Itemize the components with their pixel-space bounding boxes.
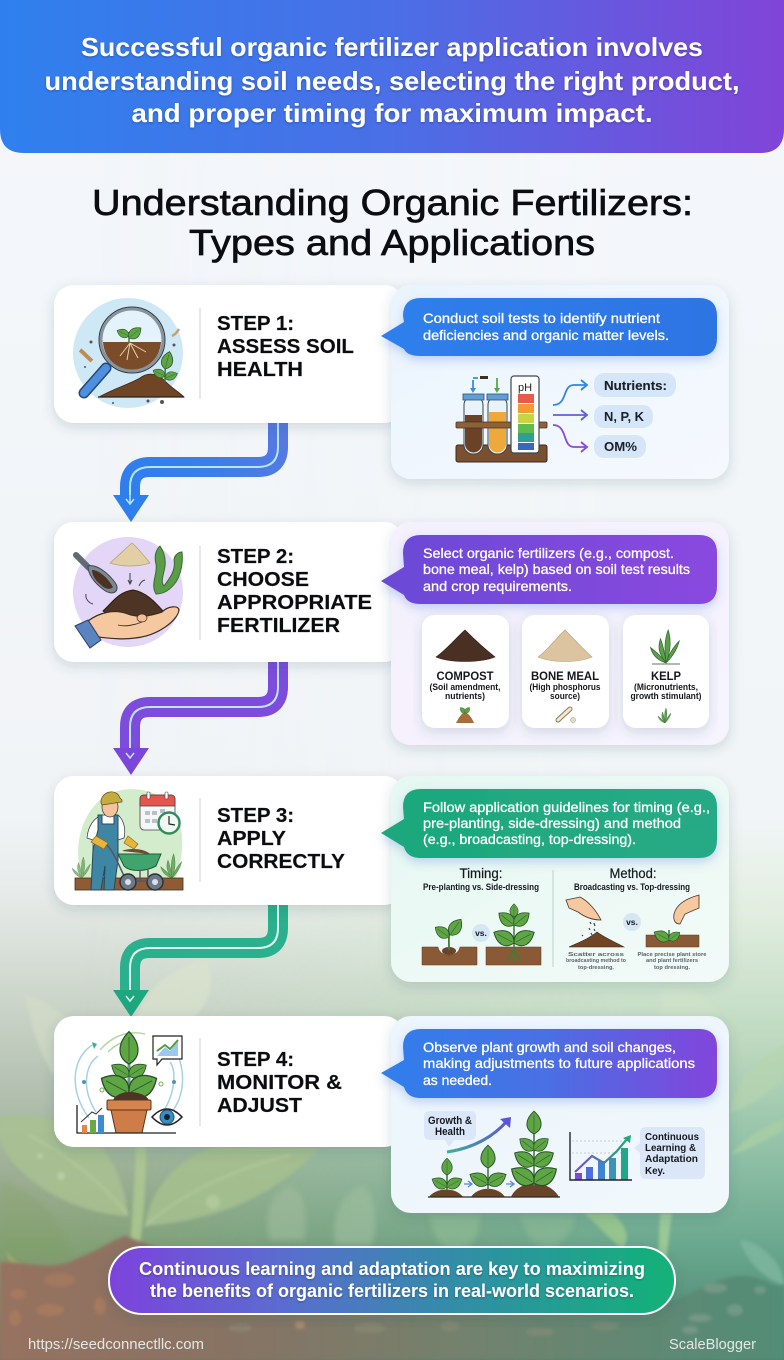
step 4 heading: ADJUST (217, 1094, 302, 1117)
method column: Place precise plant store (638, 952, 707, 958)
icon: test tubes and pH strip: pH (518, 382, 532, 394)
card: compost: COMPOST (436, 669, 494, 683)
continuous learning label: Adaptation (645, 1153, 698, 1165)
step 3 heading (217, 804, 345, 873)
step 4 heading (217, 1048, 342, 1117)
card: kelp (623, 615, 709, 728)
speech bubble (381, 535, 717, 604)
connector arrow: step 3 to step 4 (113, 903, 278, 1017)
continuous learning label: Key. (645, 1165, 665, 1177)
soil clumps (9, 1273, 766, 1336)
step 2 heading: APPROPRIATE (217, 591, 372, 614)
continuous learning label: Learning & (645, 1142, 696, 1154)
step 4 card (54, 1016, 404, 1147)
step 4 panel (381, 1016, 729, 1213)
method column (566, 866, 707, 971)
result pills (594, 373, 676, 458)
speech bubble: as needed. (423, 1072, 492, 1088)
step 3 heading: CORRECTLY (217, 850, 345, 873)
step 1 heading: HEALTH (217, 358, 303, 381)
step 2 panel (381, 522, 729, 745)
step 4 heading: STEP 4: (217, 1048, 294, 1071)
continuous learning label: Continuous (645, 1131, 699, 1143)
method column: vs. (626, 917, 638, 927)
header text: understanding soil needs, selecting the right product, (44, 66, 740, 96)
method column: Method: (610, 866, 656, 881)
timing column: Pre-planting vs. Side-dressing (423, 882, 539, 893)
result pills: Nutrients: (604, 378, 667, 393)
title: Understanding Organic Fertilizers: (92, 182, 693, 223)
divider (199, 546, 201, 640)
arrows to results (553, 380, 587, 452)
speech bubble: and crop requirements. (423, 578, 572, 594)
speech bubble: Observe plant growth and soil changes, (423, 1039, 676, 1055)
growth and health label (424, 1111, 476, 1147)
footer brand: ScaleBlogger (669, 1337, 756, 1353)
speech bubble: Select organic fertilizers (e.g., compost. (423, 545, 674, 561)
speech bubble: bone meal, kelp) based on soil test results (423, 561, 690, 577)
icon: magnifier over soil (73, 298, 184, 408)
speech bubble: making adjustments to future applications (423, 1055, 695, 1071)
speech bubble (381, 789, 717, 858)
result pills: OM% (604, 439, 637, 454)
header text: and proper timing for maximum impact. (132, 98, 652, 128)
timing column: Timing: (460, 866, 502, 881)
card: bone meal (522, 615, 609, 728)
background plant leaves (0, 958, 784, 1285)
method column: broadcasting method to (566, 958, 626, 964)
page background (0, 833, 784, 1360)
step 2 card (54, 522, 404, 662)
icon: hand holding fertilizer (73, 537, 183, 648)
method column: top-dressing. (578, 965, 614, 971)
soil (0, 1236, 784, 1360)
card: compost: (Soil amendment, (430, 682, 500, 692)
step 3 panel (381, 776, 729, 982)
step 2 heading: STEP 2: (217, 545, 294, 568)
step 2 heading: FERTILIZER (217, 614, 340, 637)
step 1 heading: STEP 1: (217, 312, 294, 335)
divider (199, 308, 201, 399)
speech bubble (381, 1029, 717, 1098)
growth arrow (447, 1117, 511, 1152)
step 2 heading: CHOOSE (217, 568, 309, 591)
step 1 heading (217, 312, 354, 381)
method column: top dressing. (654, 965, 690, 971)
card: bone meal: BONE MEAL (531, 669, 599, 683)
soft background shapes (0, 983, 720, 1262)
card: bone meal: source) (550, 691, 580, 701)
card: kelp: (Micronutrients, (634, 682, 698, 692)
step 1 panel (381, 285, 729, 479)
speech bubble: (e.g., broadcasting, top-dressing). (423, 831, 636, 847)
card: compost: nutrients) (445, 691, 485, 701)
method column: Broadcasting vs. Top-dressing (574, 882, 690, 893)
connector arrow: step 1 to step 2 (113, 420, 278, 522)
step 1 card (54, 285, 404, 423)
closing callout (109, 1247, 675, 1314)
header banner (0, 0, 784, 153)
connector arrow: step 2 to step 3 (113, 660, 278, 775)
speech bubble (381, 298, 717, 356)
growth and health label: Growth & (428, 1115, 472, 1127)
step 4 heading: MONITOR & (217, 1071, 342, 1094)
card: kelp: growth stimulant) (630, 691, 702, 701)
method column: Scatter across (568, 952, 624, 958)
three growing plants (428, 1111, 561, 1197)
icon: test tubes and pH strip (456, 376, 547, 462)
header text: Successful organic fertilizer application involves (81, 32, 703, 62)
card: bone meal: (High phosphorus (530, 682, 600, 692)
method column: and plant fertilizers (646, 958, 698, 964)
speech bubble: Conduct soil tests to identify nutrient (423, 310, 660, 326)
step 3 heading: APPLY (217, 827, 286, 850)
header text (44, 32, 740, 128)
step 3 card (54, 776, 404, 905)
icon: farmer with spreader (72, 789, 183, 890)
small bar chart (570, 1132, 632, 1180)
continuous learning label (634, 1127, 705, 1179)
title (92, 182, 693, 263)
step 3 heading: STEP 3: (217, 804, 294, 827)
timing column (422, 866, 541, 965)
step 2 heading (217, 545, 372, 637)
speech bubble: Follow application guidelines for timing (e.g., (423, 799, 710, 815)
closing callout: the benefits of organic fertilizers in real-world scenarios. (150, 1281, 634, 1301)
footer url: https://seedconnectllc.com (28, 1337, 204, 1353)
speech bubble: deficiencies and organic matter levels. (423, 327, 669, 343)
card: kelp: KELP (651, 669, 681, 683)
timing column: vs. (475, 928, 487, 938)
result pills: N, P, K (604, 409, 645, 424)
step 1 heading: ASSESS SOIL (217, 335, 354, 358)
closing callout: Continuous learning and adaptation are key to maximizing (139, 1259, 645, 1279)
divider (199, 798, 201, 882)
title: Types and Applications (189, 222, 595, 263)
divider (199, 1038, 201, 1126)
growth and health label: Health (435, 1126, 465, 1138)
icon: potted plant with chart and eye (75, 1032, 183, 1133)
speech bubble: pre-planting, side-dressing) and method (423, 815, 681, 831)
card: compost (422, 615, 509, 728)
